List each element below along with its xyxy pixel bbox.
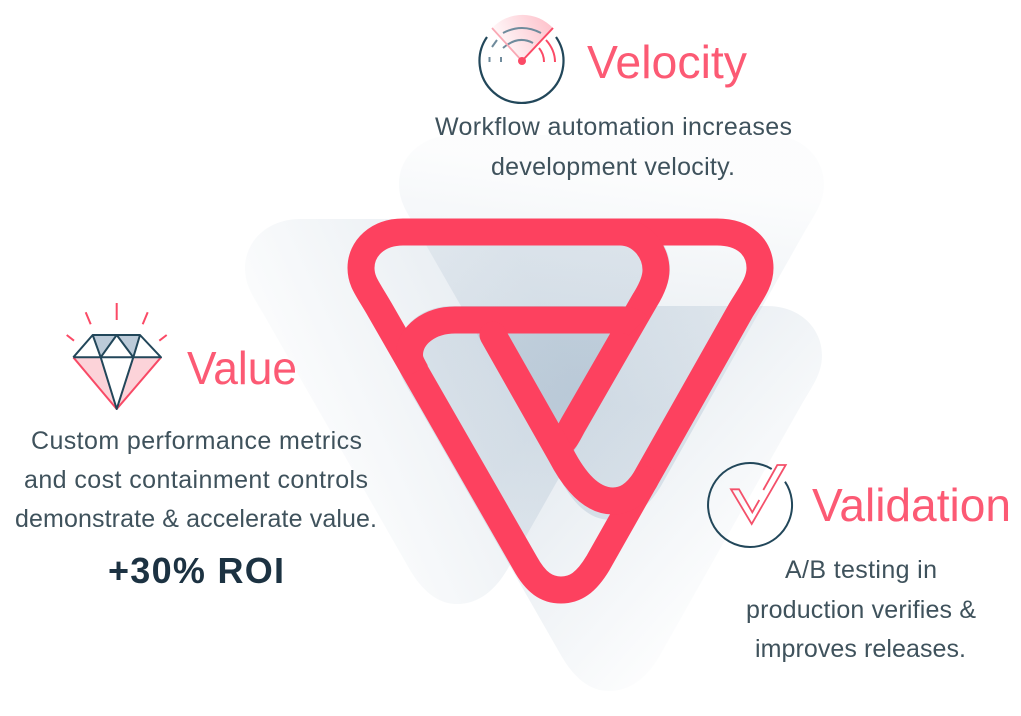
background triangle: top: [399, 135, 824, 520]
text: value description: and cost containment controls: [24, 466, 368, 494]
background triangle: left: [245, 219, 670, 604]
heading: Value: Value: [187, 342, 297, 394]
heading: Validation: Validation: [812, 479, 1011, 531]
text: validation description: production verifies &: [746, 596, 976, 624]
text: velocity description: [435, 113, 792, 181]
icon: check mark: [708, 463, 792, 547]
text: velocity description: Workflow automation increases: [435, 113, 792, 141]
background triangle: right: [397, 306, 822, 691]
text: validation description: A/B testing in: [785, 556, 937, 584]
stat: ROI: +30% ROI: [108, 550, 284, 591]
icon: speedometer: [480, 15, 564, 103]
text: velocity description: development velocity.: [491, 153, 735, 181]
logo: interlocking triangle: [361, 232, 760, 590]
heading: Velocity: Velocity: [587, 36, 747, 88]
text: value description: Custom performance metrics: [31, 427, 362, 455]
text: validation description: improves releases.: [755, 635, 966, 663]
icon: diamond: [67, 303, 167, 409]
text: validation description: [746, 556, 976, 663]
text: value description: demonstrate & accelerate value.: [15, 505, 377, 533]
text: value description: [15, 427, 377, 533]
